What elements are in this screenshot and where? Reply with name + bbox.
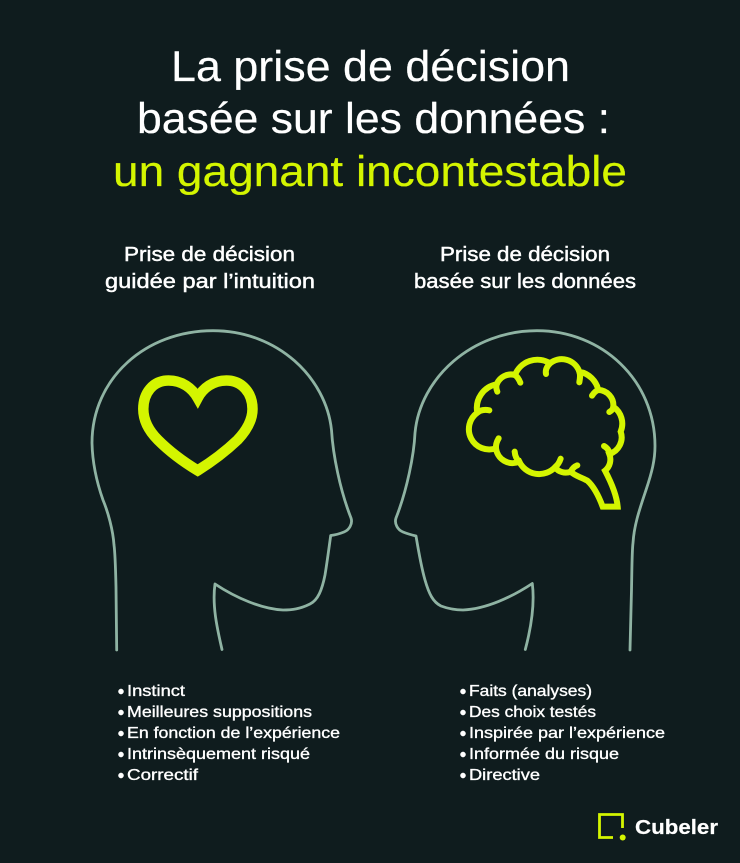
heading: intuition: Prise de décision — [124, 244, 295, 266]
list: data traits: Inspirée par l’expérience — [469, 725, 665, 742]
list: intuition traits: Instinct — [127, 683, 186, 700]
logo: Cubeler — [600, 814, 718, 840]
head outline: right — [395, 331, 655, 650]
list: data traits: Faits (analyses) — [469, 683, 592, 700]
title — [113, 43, 627, 196]
logo: Cubeler: Cubeler — [635, 817, 718, 839]
list: intuition traits: Correctif — [127, 767, 199, 784]
list: data traits — [460, 683, 665, 784]
list: data traits: Directive — [469, 767, 540, 784]
title: basée sur les données : — [137, 95, 610, 143]
heading: data — [414, 244, 636, 293]
list: data traits: Des choix testés — [469, 704, 596, 721]
title: La prise de décision — [171, 43, 570, 91]
list: intuition traits: En fonction de l’expérience — [127, 725, 340, 742]
heading: data: Prise de décision — [440, 244, 610, 266]
head outline: left — [92, 331, 352, 650]
list: intuition traits — [118, 683, 340, 784]
heading: intuition — [105, 244, 315, 293]
list: data traits: Informée du risque — [469, 746, 619, 763]
list: intuition traits: Meilleures suppositions — [127, 704, 312, 721]
list: intuition traits: Intrinsèquement risqué — [127, 746, 310, 763]
icon: heart — [143, 380, 252, 470]
heading: data: basée sur les données — [414, 271, 636, 293]
title: un gagnant incontestable — [113, 148, 627, 196]
icon: brain — [469, 359, 622, 507]
heading: intuition: guidée par l’intuition — [105, 271, 315, 293]
